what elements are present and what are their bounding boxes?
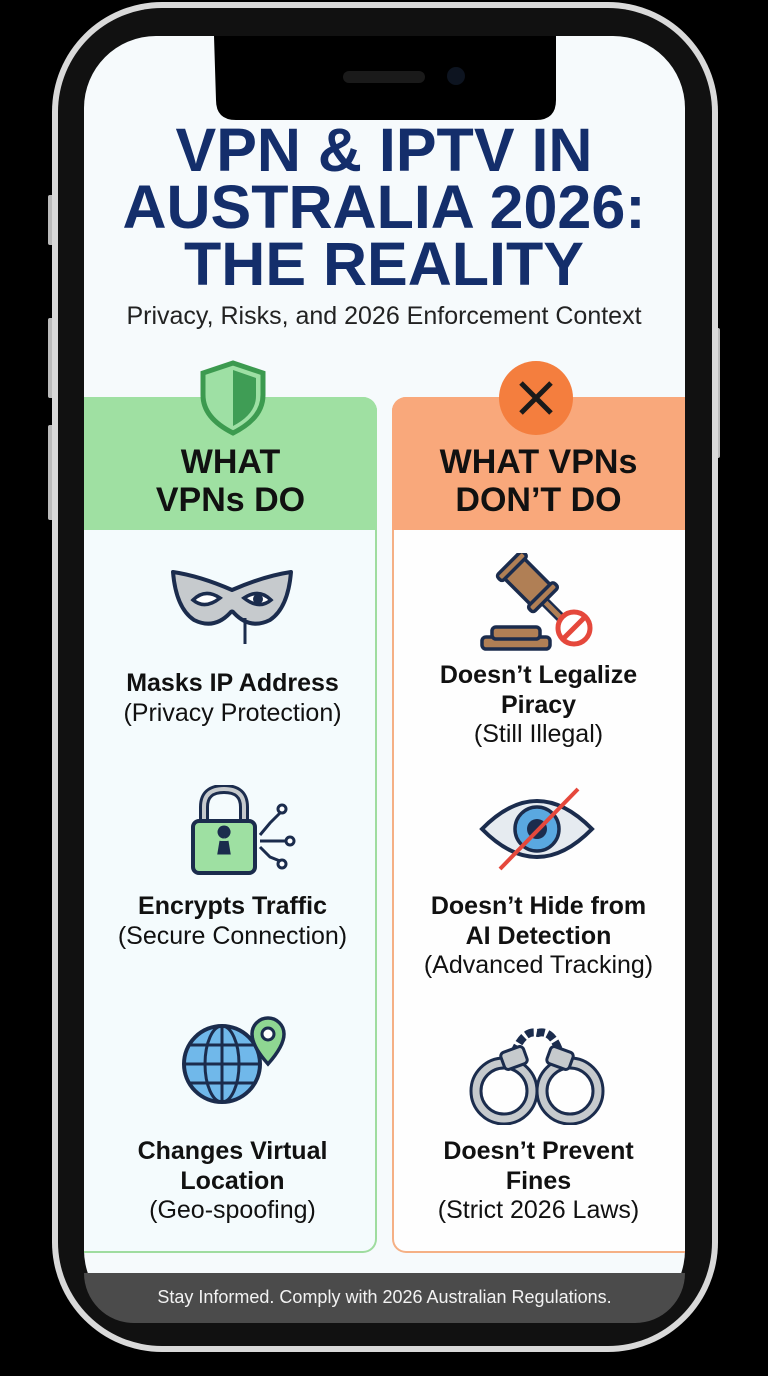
title: VPN & IPTV IN xyxy=(176,116,592,184)
text: masks IP: Masks IP Address xyxy=(126,669,339,697)
header: what VPNs don't do xyxy=(392,397,685,530)
header: what VPNs do xyxy=(84,397,377,530)
footer: Stay Informed. Comply with 2026 Australian Regulations. xyxy=(157,1287,612,1307)
footer xyxy=(84,1273,685,1323)
text: masks IP: (Privacy Protection) xyxy=(123,698,342,726)
text: doesn't legalize: Piracy xyxy=(501,690,576,718)
text: fines xyxy=(438,1137,639,1224)
text: changes location xyxy=(138,1137,327,1224)
title xyxy=(122,116,646,298)
icon: mask xyxy=(171,570,293,644)
text: changes location: (Geo-spoofing) xyxy=(149,1196,316,1224)
text: encrypts: Encrypts Traffic xyxy=(138,892,327,920)
icon: handcuffs xyxy=(470,1028,604,1125)
subtitle: Privacy, Risks, and 2026 Enforcement Context xyxy=(126,302,642,330)
text: fines: Doesn’t Prevent xyxy=(443,1137,634,1165)
title: THE REALITY xyxy=(184,230,584,298)
text: AI detection: Doesn’t Hide from xyxy=(431,892,646,920)
text: encrypts: (Secure Connection) xyxy=(118,922,347,950)
icon: globe with pin xyxy=(182,1016,286,1104)
icon: gavel with no sign xyxy=(480,553,592,651)
header: what VPNs don't do: DON’T DO xyxy=(455,481,622,519)
text: changes location: Location xyxy=(180,1166,285,1194)
text: AI detection: AI Detection xyxy=(466,922,611,950)
text: changes location: Changes Virtual xyxy=(138,1137,327,1165)
text: encrypts xyxy=(118,892,347,950)
text: masks IP xyxy=(123,669,342,726)
title: AUSTRALIA 2026: xyxy=(122,173,646,241)
text: doesn't legalize: Doesn’t Legalize xyxy=(440,661,637,689)
header: what VPNs don't do: WHAT VPNs xyxy=(440,443,637,481)
panel: what VPNs don't do xyxy=(392,397,685,1253)
header: what VPNs do: VPNs DO xyxy=(156,481,305,519)
text: fines: Fines xyxy=(506,1166,571,1194)
icon: shield xyxy=(200,360,266,436)
text: doesn't legalize xyxy=(440,661,637,748)
text: fines: (Strict 2026 Laws) xyxy=(438,1196,639,1224)
text: AI detection xyxy=(424,892,653,979)
text: doesn't legalize: (Still Illegal) xyxy=(474,720,603,748)
icon: X circle xyxy=(499,361,573,435)
text: AI detection: (Advanced Tracking) xyxy=(424,951,653,979)
icon: lock xyxy=(191,785,296,875)
header: what VPNs do: WHAT xyxy=(181,443,280,481)
icon: crossed eye xyxy=(479,788,595,870)
panel: what VPNs do xyxy=(84,397,377,1253)
